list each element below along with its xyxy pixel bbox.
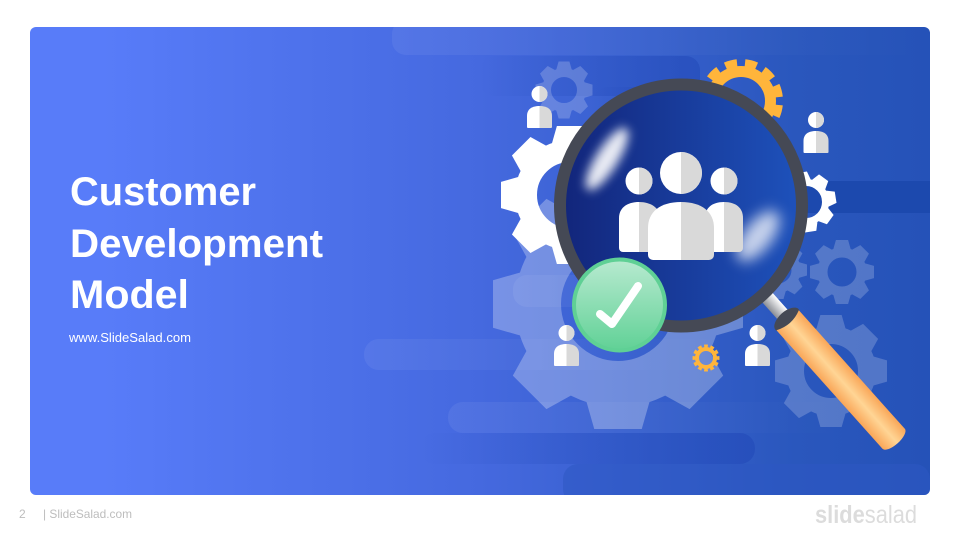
title: Customer (70, 170, 256, 214)
subtitle: website: www.SlideSalad.com (68, 330, 191, 345)
gear: blue mid right hidden (749, 241, 807, 299)
footer: site name: | SlideSalad.com (43, 507, 132, 521)
footer: page number: 2 (19, 507, 26, 521)
title: Development (70, 222, 323, 266)
gear: blue lower right (775, 315, 887, 427)
icon: person lower right (745, 325, 770, 366)
icon: person lower left (554, 325, 579, 366)
gear: large translucent centre (493, 179, 743, 429)
icon: magnifying glass handle (745, 275, 909, 454)
gear: small white right (772, 168, 840, 236)
gear: tiny orange (694, 346, 718, 370)
title: Model (70, 273, 189, 317)
icon: group of people (619, 152, 743, 260)
icon: person top left (527, 86, 552, 128)
title (70, 170, 323, 317)
icon: magnifying glass lens (560, 84, 802, 326)
gear: white left (501, 126, 639, 264)
gear: blue mid right (810, 240, 874, 304)
gear: blue top left (536, 62, 592, 118)
gear: orange top (694, 54, 788, 148)
footer: slidesalad logo: slidesalad (815, 501, 917, 529)
icon: green check badge (574, 260, 665, 350)
icon: person top right (804, 112, 828, 153)
